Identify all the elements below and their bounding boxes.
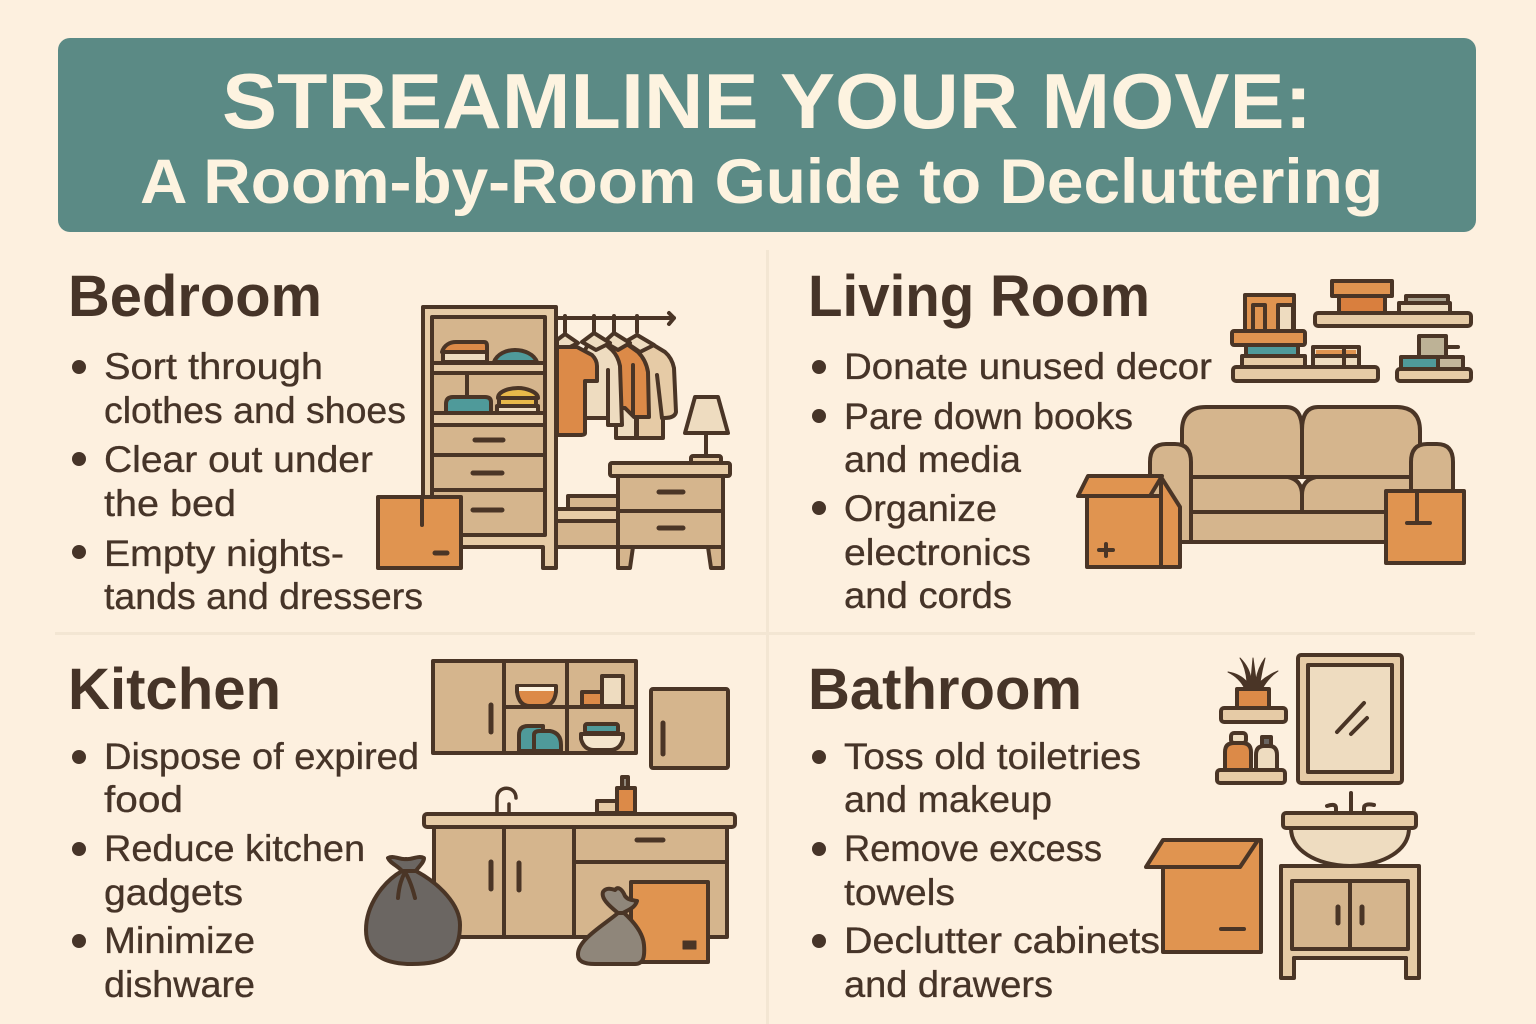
bedroom checklist: tands and dressers [104,576,423,617]
illustration: living room [1078,281,1471,567]
kitchen checklist: Minimize [104,920,255,961]
icon: sofa [1150,407,1453,542]
icon: wardrobe [423,307,556,568]
icon: top wall shelf [1315,281,1471,326]
kitchen checklist: dishware [104,964,255,1005]
icon: base cabinet [424,814,735,937]
icon: large trash bag [366,857,460,964]
icon: under-bed drawers [554,496,620,547]
panel: living room [808,264,1471,616]
heading: living room: Living Room [808,264,1150,329]
kitchen checklist: Reduce kitchen [104,828,365,869]
icon: left wall shelf [1232,295,1378,381]
icon: open box [1078,476,1180,567]
icon: hanging clothes [557,333,676,438]
heading: kitchen: Kitchen [68,657,281,722]
icon: taped box [1386,491,1464,563]
bedroom checklist: clothes and shoes [104,390,406,431]
icon: right wall shelf [1397,336,1471,381]
illustration: bedroom furniture [378,307,730,568]
icon: upper cabinet [433,661,636,753]
illustration: kitchen [366,661,735,964]
icon: lamp [685,397,728,463]
icon: small cabinet [651,689,728,768]
icon: bottles on shelf [1217,733,1285,783]
icon: small trash bag [578,888,644,964]
panel: kitchen [68,657,735,1005]
icon: box [631,882,708,962]
icon: vanity cabinet [1281,866,1419,978]
bedroom checklist [72,346,423,617]
icon: mirror [1298,655,1402,783]
icon: clothes rail [556,313,674,332]
icon: cardboard box [378,497,461,568]
living room checklist: and media [844,439,1021,480]
bedroom checklist: Empty nights- [104,533,344,574]
panel: bathroom [808,655,1419,1005]
bathroom checklist: towels [844,872,955,913]
title: STREAMLINE YOUR MOVE: [222,57,1312,145]
bathroom checklist: Toss old toiletries [844,736,1141,777]
icon: potted plant on shelf [1221,658,1286,722]
bathroom checklist: and drawers [844,964,1053,1005]
living room checklist: electronics [844,532,1031,573]
living room checklist: and cords [844,575,1012,616]
kitchen checklist: Dispose of expired [104,736,419,777]
living room checklist: Pare down books [844,396,1133,437]
living room checklist: Organize [844,488,997,529]
icon: sink [1283,793,1416,866]
kitchen checklist [72,736,419,1005]
title banner [58,38,1476,232]
bathroom checklist: and makeup [844,779,1052,820]
bathroom checklist: Remove excess [844,828,1102,869]
kitchen checklist: gadgets [104,872,243,913]
icon: open box [1146,840,1261,952]
subtitle: A Room-by-Room Guide to Decluttering [140,147,1383,217]
icon: faucet [497,788,516,813]
panel: bedroom [68,264,730,617]
living room checklist [812,346,1212,616]
heading: bathroom: Bathroom [808,657,1082,722]
bathroom checklist: Declutter cabinets [844,920,1160,961]
bedroom checklist: the bed [104,483,236,524]
bedroom checklist: Sort through [104,346,323,387]
icon: counter bottle [597,777,635,813]
living room checklist: Donate unused decor [844,346,1212,387]
bedroom checklist: Clear out under [104,439,373,480]
heading: bedroom: Bedroom [68,264,322,329]
kitchen checklist: food [104,779,183,820]
bathroom checklist [812,736,1160,1005]
illustration: bathroom [1146,655,1419,978]
icon: nightstand [610,463,730,568]
